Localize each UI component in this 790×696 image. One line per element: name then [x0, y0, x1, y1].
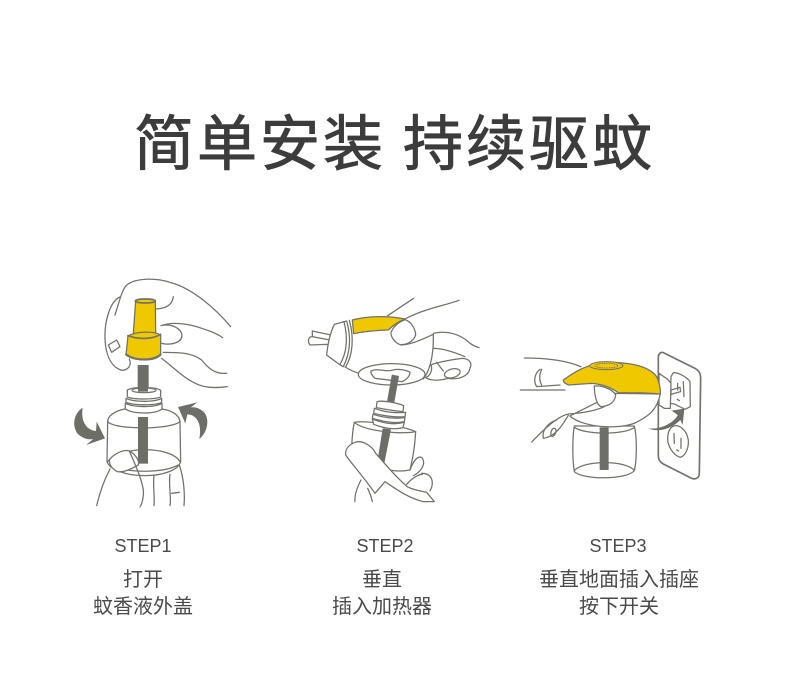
- yellow cap: [126, 299, 161, 360]
- step 3 description: 垂直地面插入插座: [539, 569, 699, 591]
- step 2 description: 垂直: [362, 569, 402, 591]
- step 2 label: STEP2: [356, 536, 414, 556]
- arrows: [74, 408, 105, 445]
- step 1 description: [93, 569, 193, 618]
- heater body edges: [345, 367, 360, 374]
- plug: [308, 331, 334, 345]
- title: 简单安装 持续驱蚊: [134, 111, 655, 178]
- hand: [524, 358, 581, 367]
- body: [570, 393, 660, 427]
- step 2 description: [332, 569, 432, 618]
- icon: step 1 opening the refill cap: [74, 279, 231, 507]
- step 3 description: 按下开关: [579, 596, 659, 618]
- bottle: [573, 426, 636, 478]
- bottom hand: [346, 442, 434, 502]
- step 1 description: 打开: [123, 569, 163, 591]
- icon: step 3 plugging heater into socket: [520, 352, 701, 479]
- step 3 label: STEP3: [589, 536, 647, 556]
- bottle: [107, 409, 181, 476]
- wall socket: [658, 352, 701, 479]
- step 3 description: [539, 568, 699, 618]
- icon: step 2 inserting refill into heater: [308, 298, 479, 502]
- step 2 description: 插入加热器: [332, 596, 432, 618]
- bottom hand: [97, 469, 110, 506]
- step 1 description: 蚊香液外盖: [93, 596, 193, 618]
- arrow: [648, 409, 684, 430]
- step 1 label: STEP1: [114, 536, 172, 556]
- bottle: [352, 422, 416, 471]
